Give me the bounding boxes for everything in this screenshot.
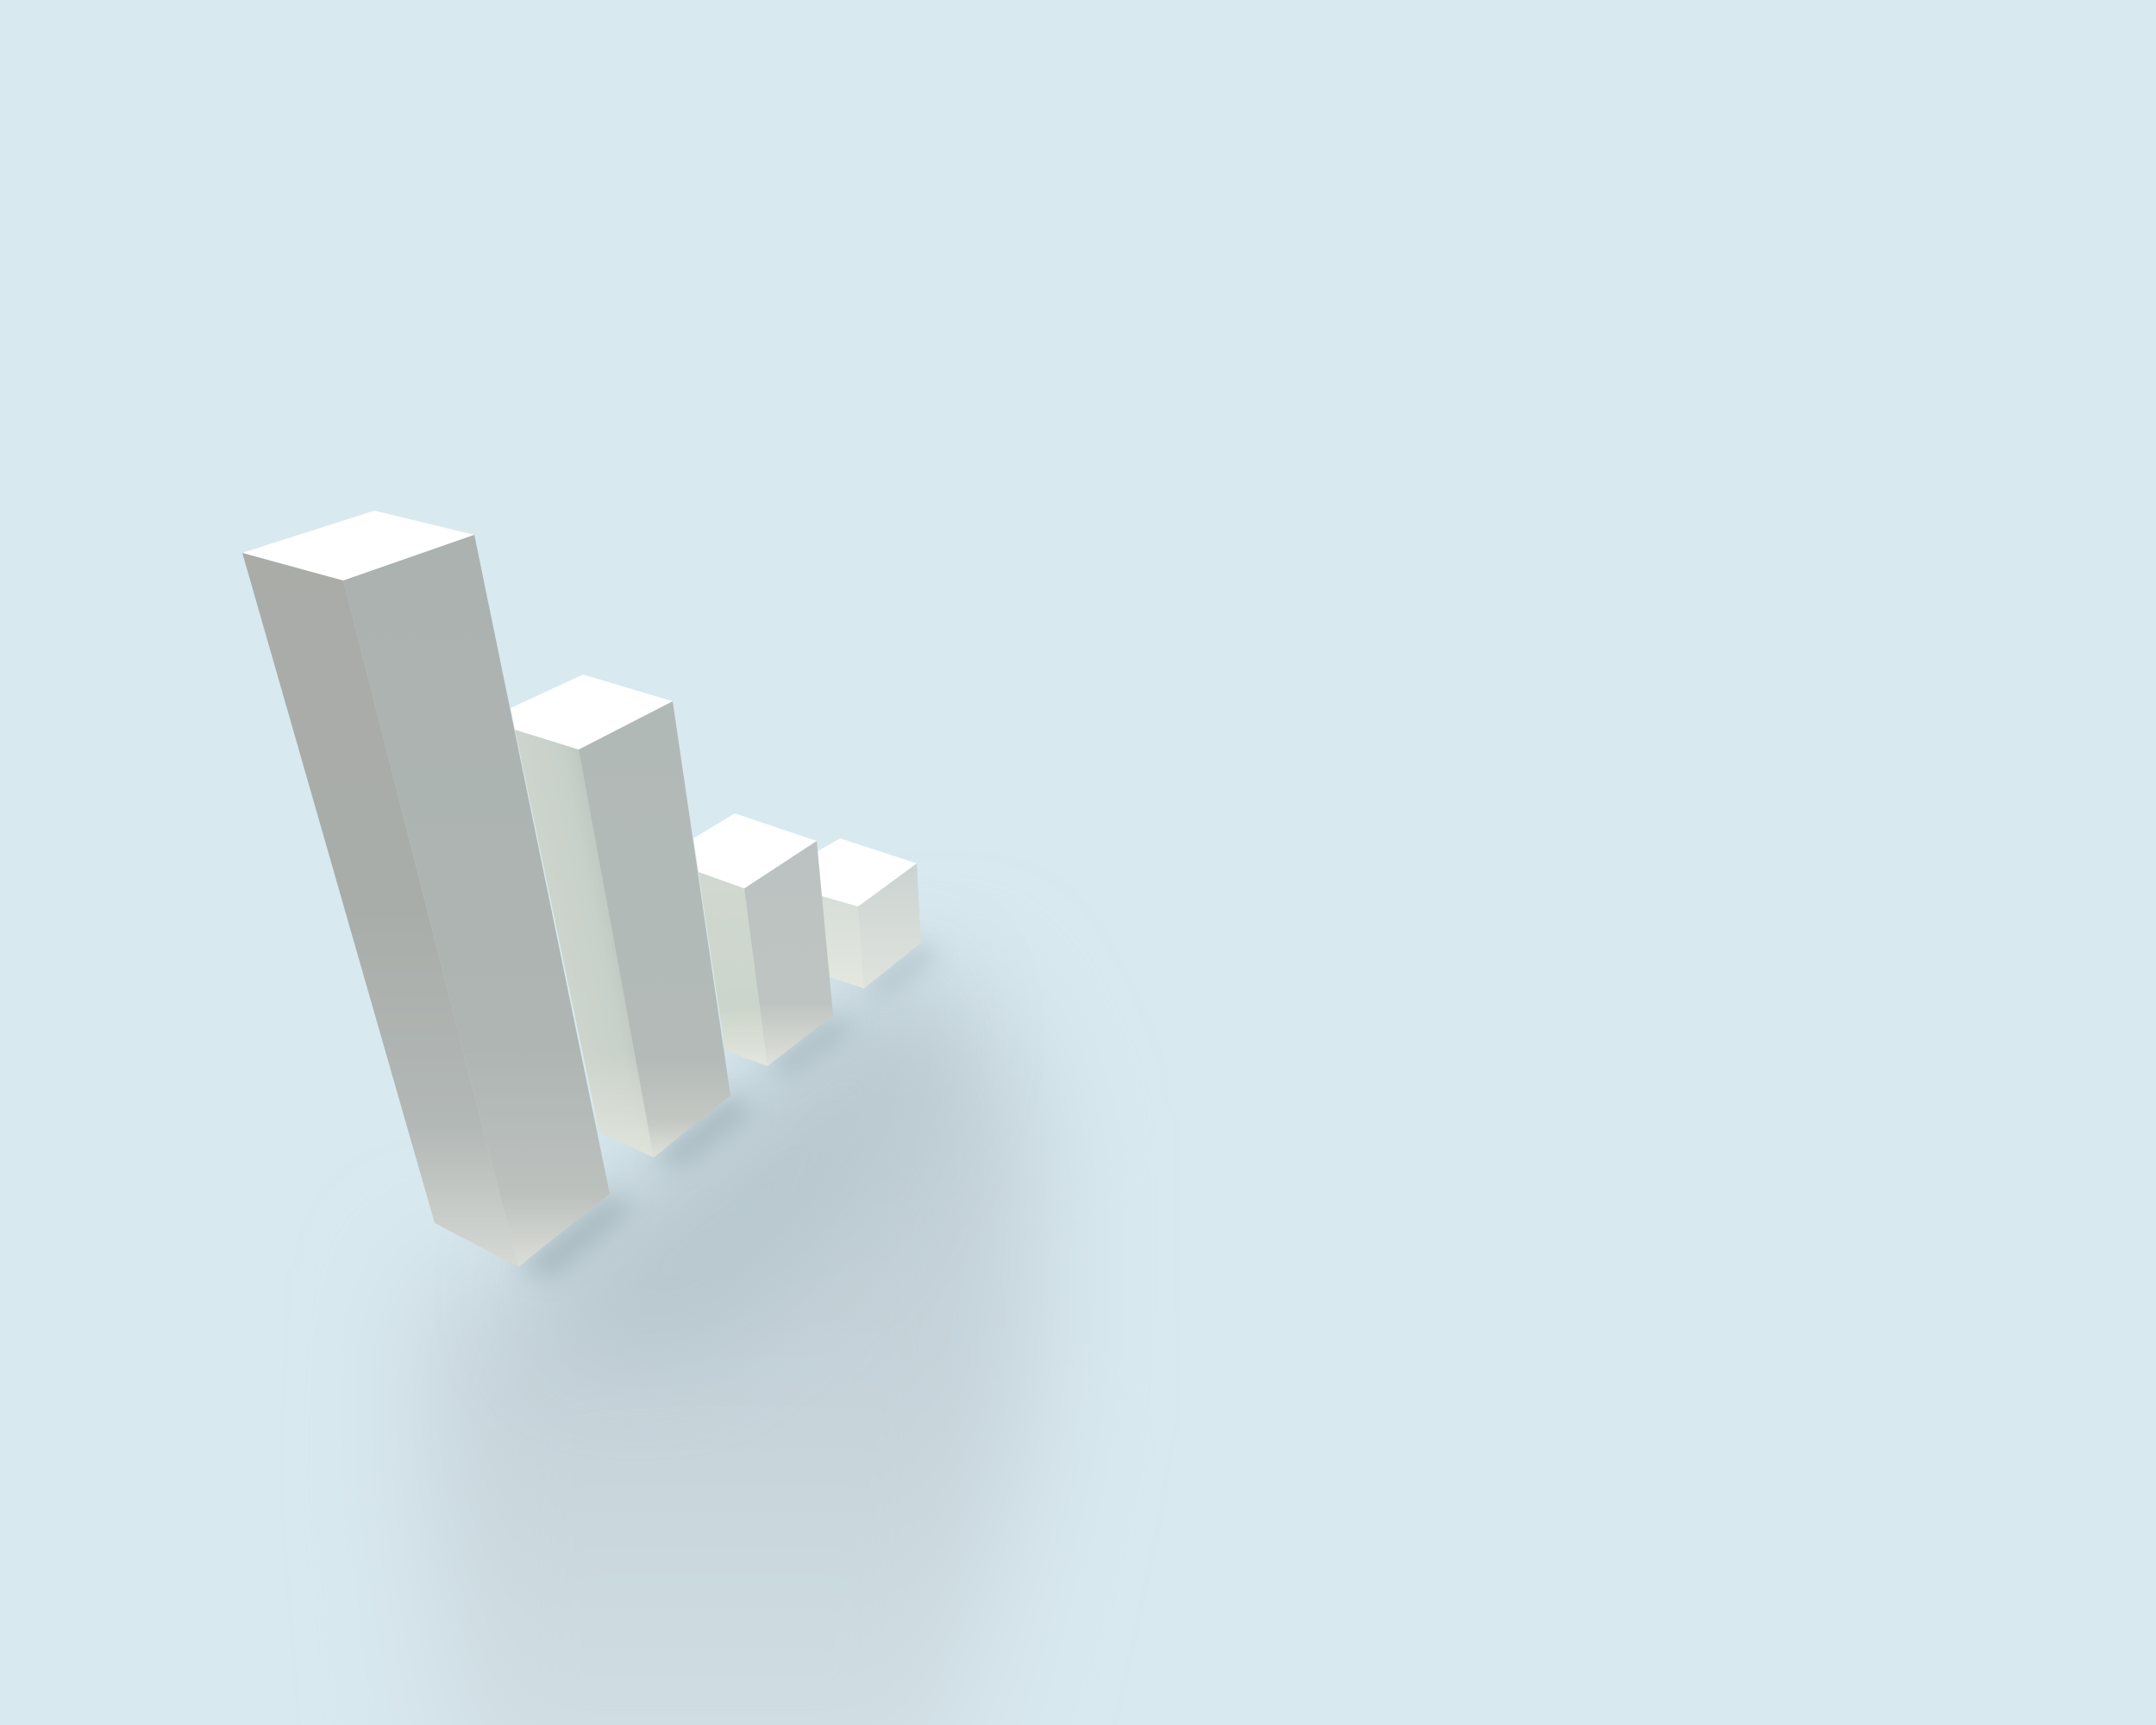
bar 4: smallest: [818, 838, 921, 988]
bar 1: tallest: [242, 511, 610, 1267]
soft cast shadow on the floor: [423, 966, 1035, 1725]
bar 2: medium: [511, 674, 730, 1157]
bar 3: short: [693, 813, 833, 1066]
contact shadows at bar bases: [518, 943, 938, 1278]
